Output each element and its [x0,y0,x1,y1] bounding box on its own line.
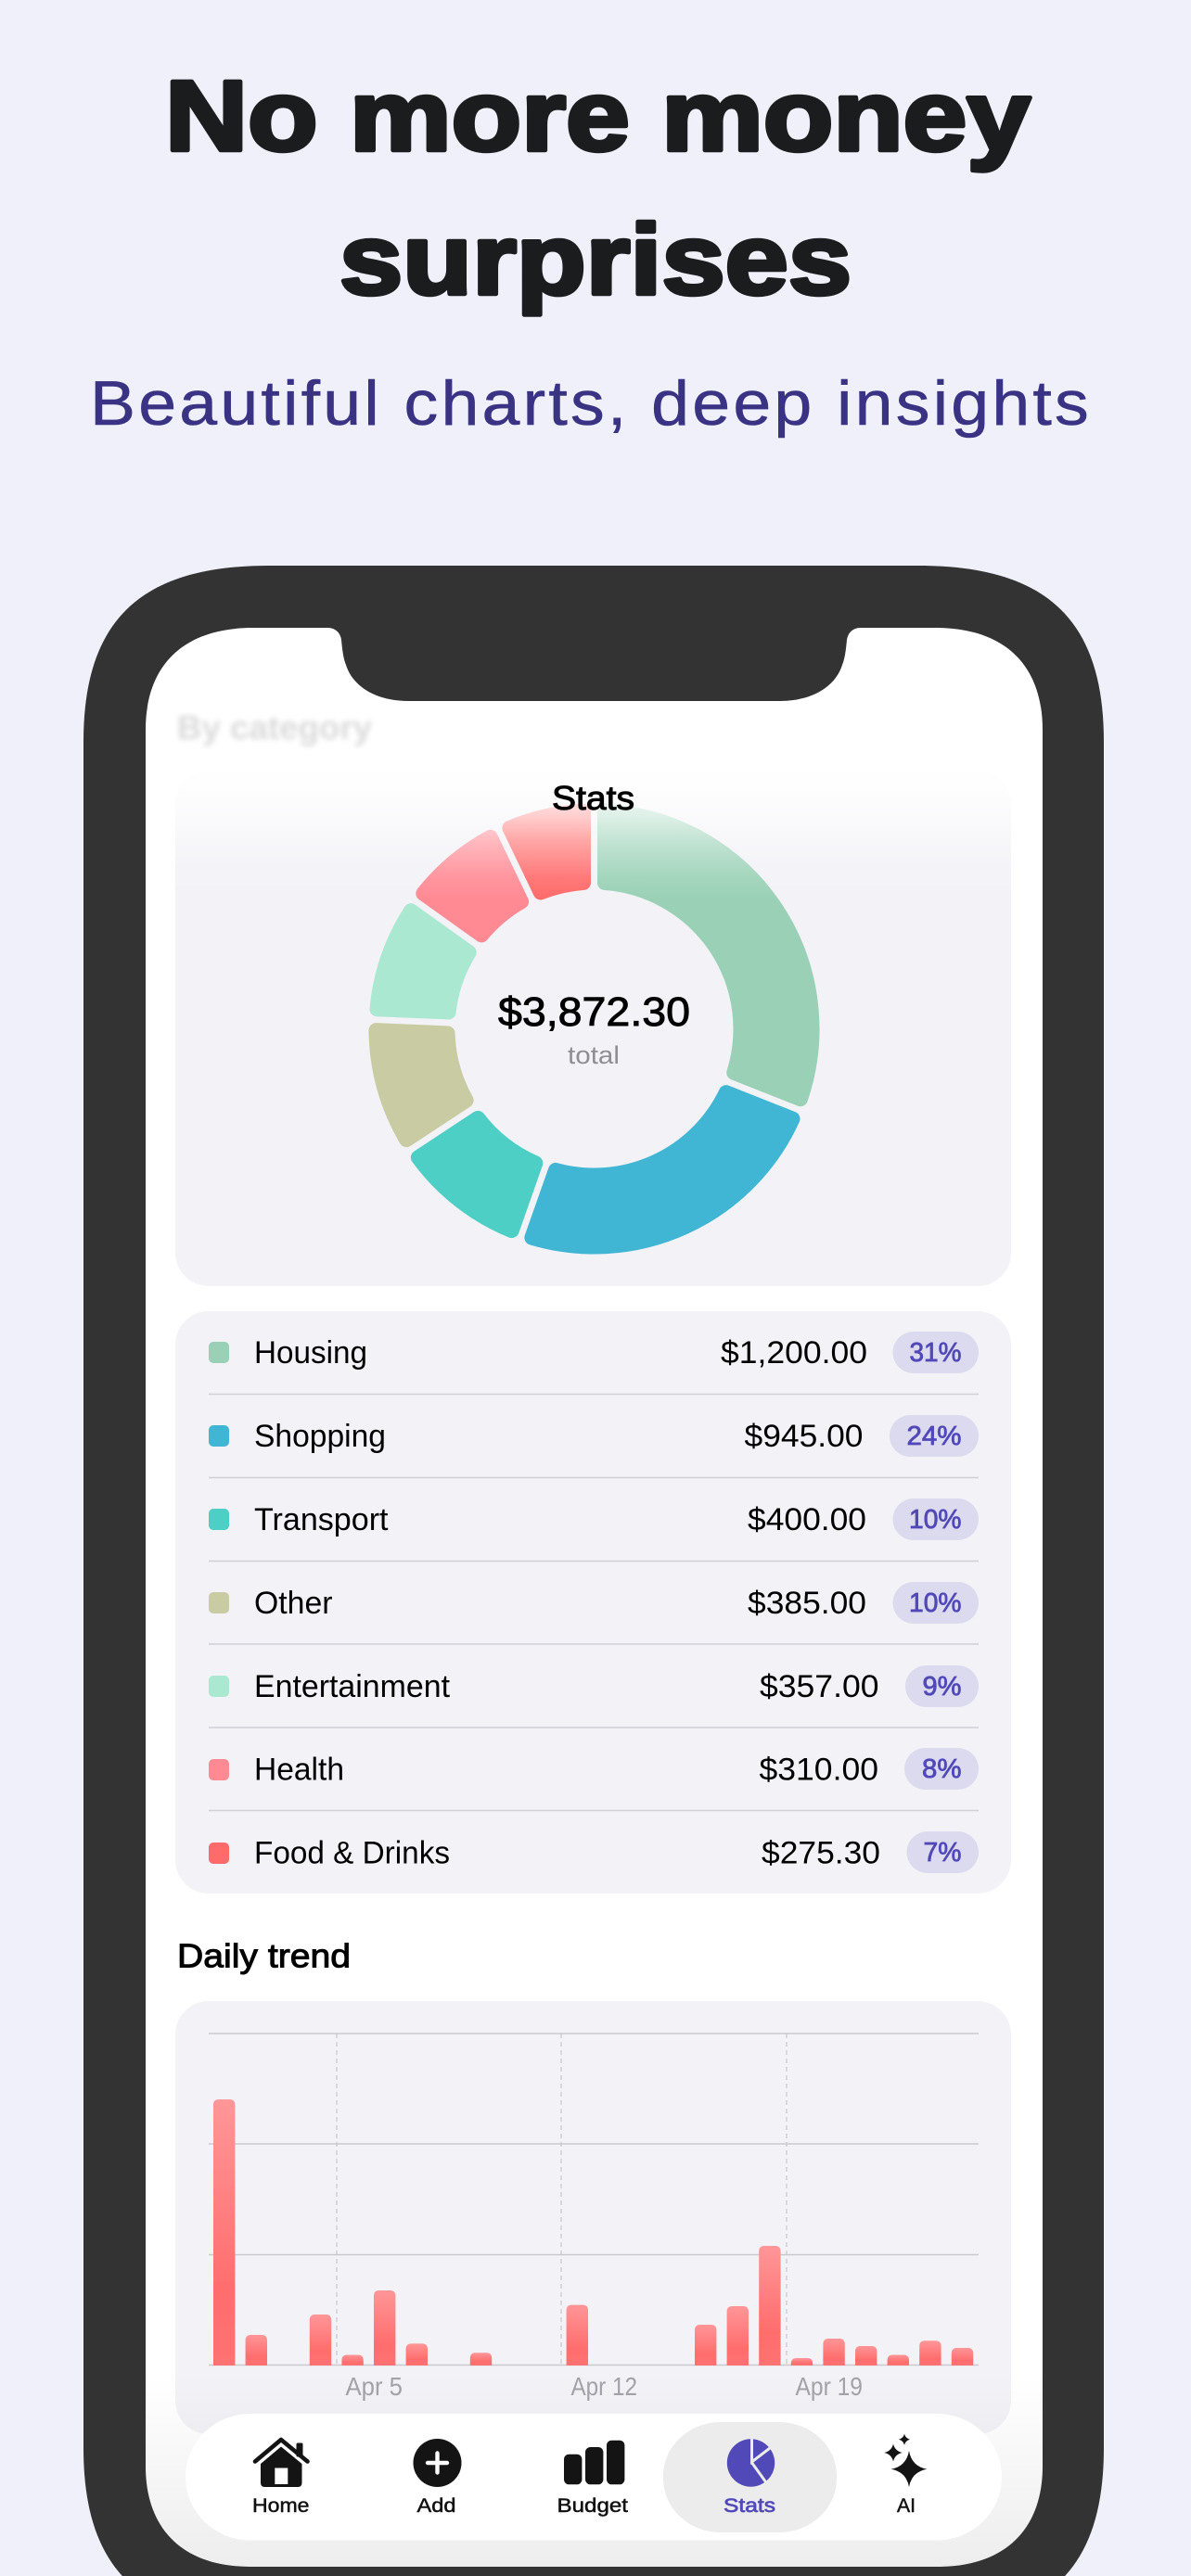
row: Shopping: $945.00 [744,1419,863,1454]
row: Shopping: 24% [907,1422,961,1451]
title: surprises [339,203,852,315]
heading: Daily trend: Daily trend [177,1936,351,1975]
phone screen [146,628,1043,2567]
segment: Housing [605,811,812,1099]
row: Entertainment: 9% [922,1672,961,1702]
row: Other: Other [254,1586,332,1621]
tab: Stats [724,2438,775,2517]
row: Food and Drinks [209,1831,979,1873]
row: Shopping: Shopping [254,1419,386,1454]
icon: bars [564,2441,624,2484]
tab bar [186,2414,1002,2541]
row: Other: $385.00 [748,1586,866,1621]
tab: Add: Add [417,2494,456,2517]
row: Transport: Transport [254,1502,389,1537]
x axis labels: Apr 12 [571,2372,637,2401]
segment: Entertainment [377,911,469,1012]
icon: plus circle [414,2439,462,2487]
title: No more money [165,59,1031,172]
row: Health: Health [254,1753,344,1788]
tab: Stats: Stats [724,2494,775,2517]
row separators [209,1395,979,1810]
row: Transport [209,1498,979,1540]
panel: daily trend bar chart [175,2001,1011,2434]
donut chart [377,811,812,1246]
row: Entertainment [209,1665,979,1707]
blurred section heading: By category [177,708,372,746]
row: Housing: Housing [254,1335,367,1371]
icon: sparkles [884,2434,928,2487]
row: Transport: $400.00 [748,1502,866,1537]
row: Health [209,1748,979,1790]
daily bars [213,2099,973,2366]
tab: AI: AI [897,2494,916,2517]
row: Food and Drinks: 7% [924,1838,961,1868]
tab bar backdrop [146,2374,1043,2567]
row: Shopping [209,1415,979,1457]
icon: house [255,2440,308,2487]
row: Housing: 31% [909,1338,961,1368]
row: Transport: 10% [909,1505,961,1535]
phone frame [83,566,1104,2576]
x axis labels [345,2372,863,2401]
segment: Other [377,1030,467,1140]
panel: category list [175,1311,1011,1894]
x axis labels: Apr 19 [796,2372,863,2401]
tab: AI [884,2434,928,2517]
tab: Budget: Budget [557,2494,628,2517]
donut total caption: total [568,1041,620,1069]
tab: Add [414,2439,462,2517]
icon: pie chart [727,2438,775,2487]
row: Entertainment: $357.00 [760,1669,879,1704]
panel: donut chart card [175,770,1011,1286]
segment: Health [423,837,521,935]
segment: Shopping [531,1092,793,1246]
row: Food and Drinks: $275.30 [762,1836,880,1871]
tab: active highlight [663,2422,837,2532]
row: Food and Drinks: Food & Drinks [254,1836,450,1871]
row: Entertainment: Entertainment [254,1669,451,1704]
tab: Home: Home [252,2494,310,2517]
segment: Food and Drinks [509,811,583,892]
tab: Home [252,2440,310,2517]
row: Health: $310.00 [759,1753,878,1788]
row: Health: 8% [922,1754,961,1784]
row: Other [209,1582,979,1624]
subtitle: Beautiful charts, deep insights [90,368,1092,439]
tab: Budget [557,2441,628,2517]
top fade overlay [146,756,1043,899]
segment: Transport [418,1118,535,1231]
row: Housing [209,1332,979,1373]
donut total amount: $3,872.30 [498,989,690,1035]
title [165,59,1031,315]
row: Housing: $1,200.00 [721,1335,867,1371]
x axis labels: Apr 5 [345,2372,403,2401]
row: Other: 10% [909,1588,961,1618]
screen title: Stats [552,779,634,817]
